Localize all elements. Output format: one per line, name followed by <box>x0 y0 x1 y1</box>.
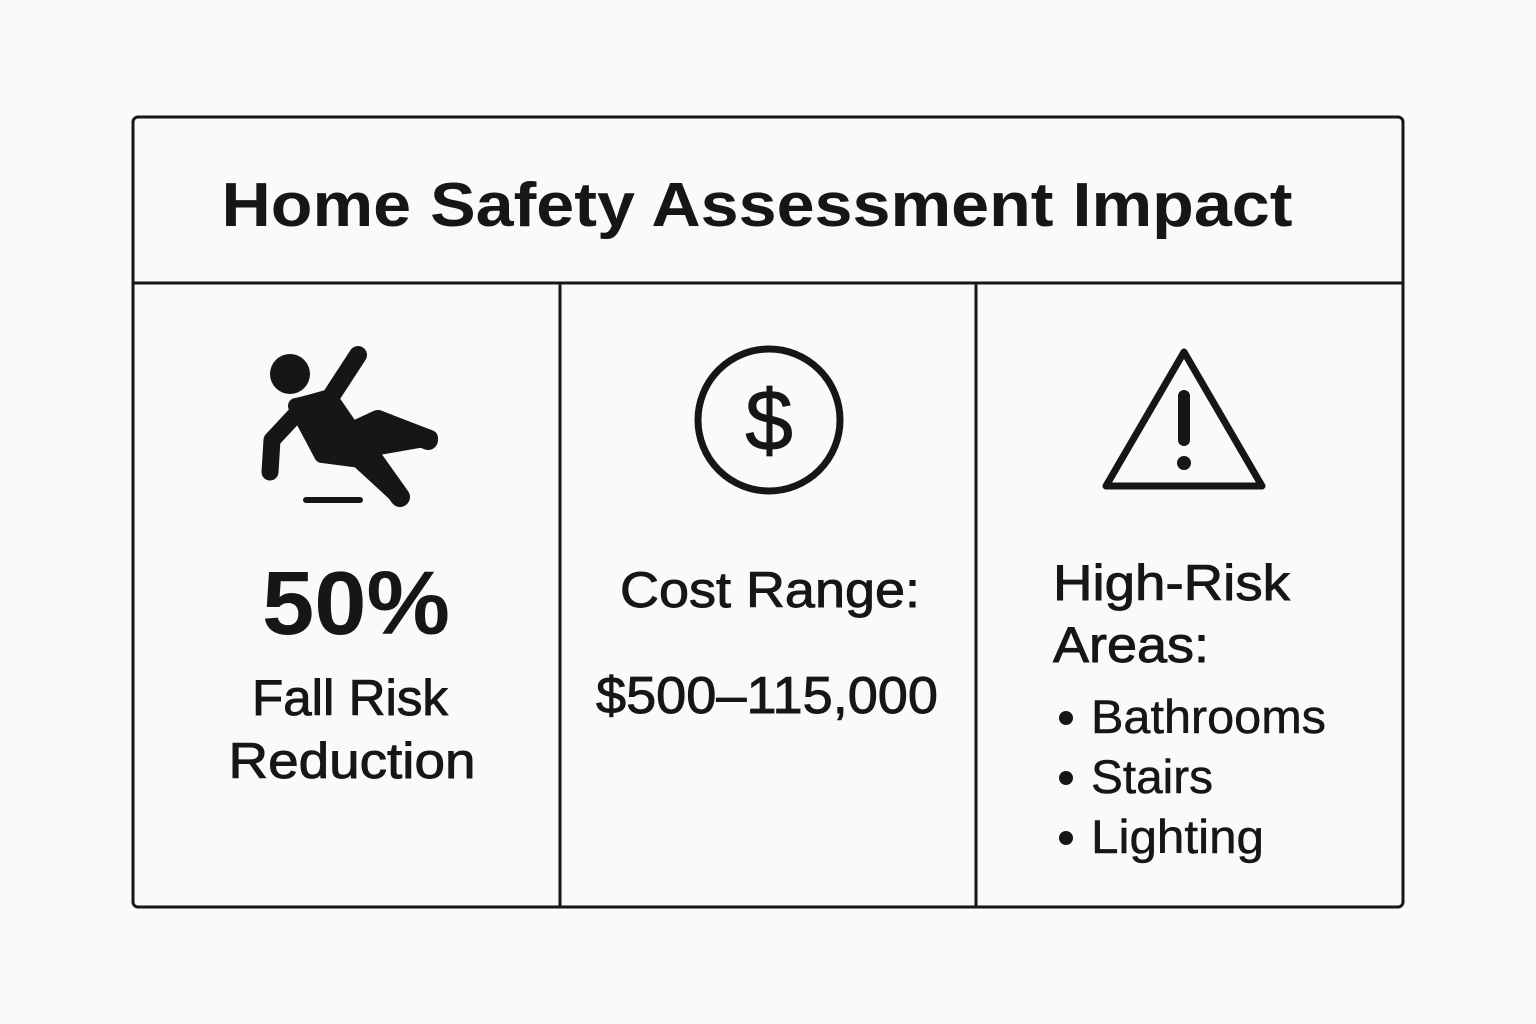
frame <box>133 117 1403 907</box>
panel: cost range <box>596 349 938 725</box>
label: fall risk reduction: Fall Risk <box>252 670 449 726</box>
stat: cost: $500–115,000 <box>596 667 938 725</box>
list: areas: Bathrooms <box>1091 690 1326 743</box>
label: cost range: Cost Range: <box>620 562 920 618</box>
stat: 50%: 50% <box>262 554 450 654</box>
title: Home Safety Assessment Impact <box>222 171 1292 240</box>
list: areas: Stairs <box>1091 750 1213 803</box>
panel: fall risk <box>228 354 476 789</box>
panel: high-risk areas <box>1053 352 1326 863</box>
icon: warning triangle <box>1106 352 1262 486</box>
list: areas: Lighting <box>1091 810 1264 863</box>
label: fall risk reduction: Reduction <box>228 733 476 789</box>
list: areas <box>1059 690 1326 863</box>
icon: dollar coin <box>698 349 840 491</box>
heading: high-risk areas <box>1053 555 1291 673</box>
heading: high-risk areas: High-Risk <box>1053 555 1291 611</box>
label: fall risk reduction <box>228 670 476 789</box>
heading: high-risk areas: Areas: <box>1053 617 1209 673</box>
icon: dollar coin: $ <box>745 373 793 469</box>
icon: falling person <box>270 354 430 500</box>
